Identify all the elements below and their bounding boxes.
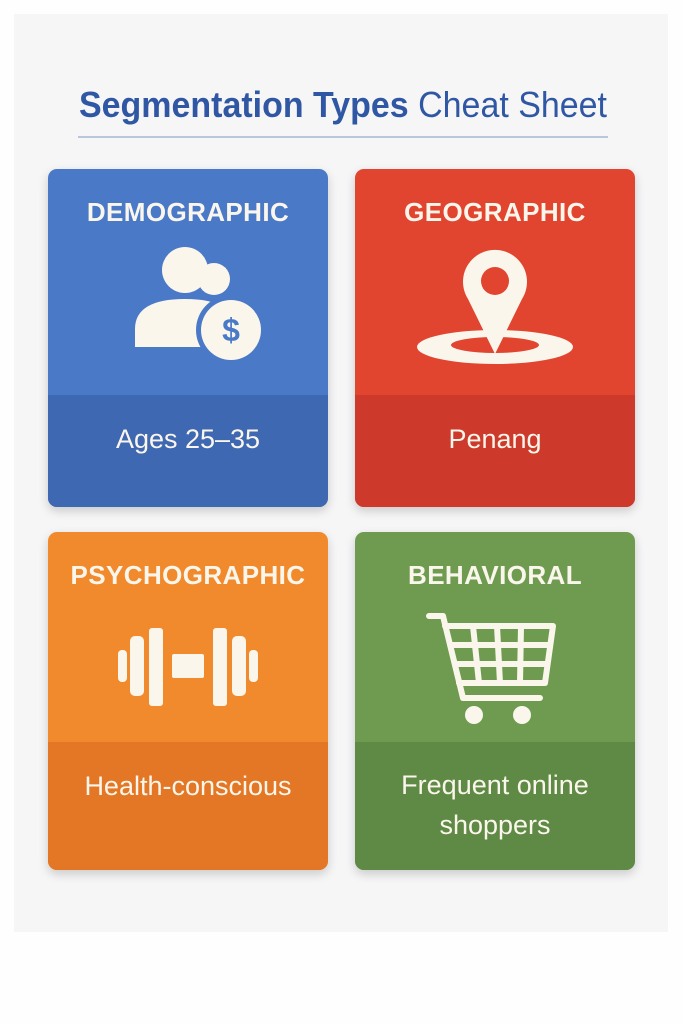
title: Segmentation Types Cheat Sheet xyxy=(79,84,607,125)
panel: geographic xyxy=(355,169,635,507)
icon: people with dollar: $ xyxy=(222,312,240,348)
heading: demographic: DEMOGRAPHIC xyxy=(87,197,289,227)
icon: people with dollar xyxy=(135,247,261,360)
icon: shopping cart xyxy=(426,613,556,724)
icon: dumbbell xyxy=(118,628,258,706)
band: ages xyxy=(48,395,328,507)
band: shoppers: shoppers xyxy=(439,810,551,840)
heading: behavioral: BEHAVIORAL xyxy=(408,560,582,590)
band: health: Health-conscious xyxy=(84,771,292,801)
band: penang: Penang xyxy=(448,424,542,454)
band: ages: Ages 25–35 xyxy=(116,424,260,454)
band: shoppers: Frequent online xyxy=(401,770,589,800)
panel: psychographic xyxy=(48,532,328,870)
panel: demographic xyxy=(48,169,328,507)
band: penang xyxy=(355,395,635,507)
band: shoppers xyxy=(355,742,635,870)
icon: map pin xyxy=(417,250,573,364)
band: health xyxy=(48,742,328,870)
panel: behavioral xyxy=(355,532,635,870)
heading: psychographic: PSYCHOGRAPHIC xyxy=(71,560,305,590)
heading: geographic: GEOGRAPHIC xyxy=(404,197,586,227)
